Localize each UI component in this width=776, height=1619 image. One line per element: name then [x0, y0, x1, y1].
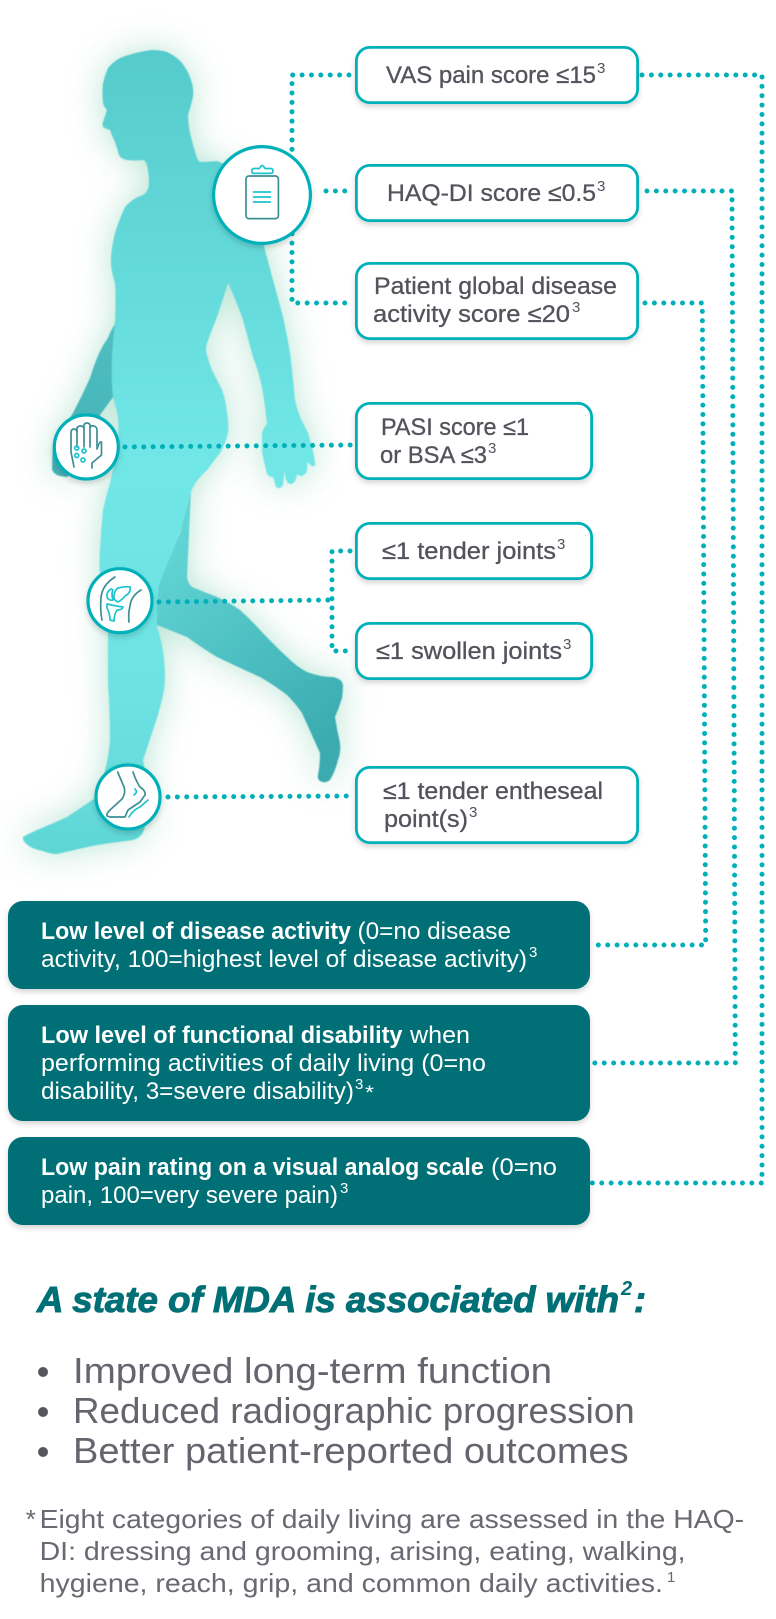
connector: VAS box to pain rating box: [592, 75, 762, 1183]
icon: knee joint: [88, 569, 152, 633]
panel: low pain rating: (0=no: [491, 1154, 557, 1181]
box: tender entheseal points: [356, 767, 638, 843]
box: HAQ-DI score: [356, 165, 638, 221]
panel: low pain rating: 3: [340, 1180, 348, 1197]
panel: low pain rating: [8, 1137, 590, 1225]
box: PASI score or BSA: [356, 403, 592, 479]
bullet list: MDA benefits: Reduced radiographic progression: [73, 1390, 635, 1431]
back arm: [52, 322, 118, 477]
panel: low level of functional disability: disability, 3=severe disability): [41, 1078, 354, 1105]
footnote: hygiene, reach, grip, and common daily activities.: [40, 1568, 663, 1598]
heading: state of MDA: 2: [620, 1278, 632, 1300]
soft glow behind figure: [23, 50, 343, 854]
panel: low level of functional disability: performing activities of daily living (0=no: [41, 1050, 486, 1077]
box: swollen joints: [356, 623, 592, 679]
connector: hand to PASI box: [125, 445, 352, 447]
footnote: Eight categories of daily living are assessed in the HAQ-: [40, 1504, 744, 1534]
box: tender joints: 3: [557, 536, 565, 553]
footnote: [26, 1504, 744, 1598]
box: VAS pain score: [356, 47, 638, 103]
box: VAS pain score: VAS pain score ≤15: [386, 62, 596, 89]
human body figure: [23, 50, 343, 854]
box: patient global disease activity score: Patient global disease: [374, 273, 617, 300]
icon: clipboard: [214, 147, 310, 243]
box: PASI score or BSA: 3: [488, 440, 496, 457]
panel: low level of functional disability: 3: [355, 1076, 363, 1093]
bullet list: MDA benefits: Better patient-reported outcomes: [73, 1430, 629, 1471]
back leg: [150, 490, 343, 782]
icon: hand with skin lesions: [54, 415, 118, 479]
box: HAQ-DI score: 3: [597, 178, 605, 195]
connector: patient global box to disease activity box: [592, 303, 706, 945]
connector: foot to entheseal box: [168, 796, 352, 797]
box: VAS pain score: 3: [597, 60, 605, 77]
connector: HAQ-DI box to functional disability box: [592, 191, 735, 1063]
connector: knee to joint boxes: [159, 551, 350, 651]
box: tender entheseal points: 3: [469, 804, 477, 821]
footnote: 1: [667, 1569, 675, 1586]
heading: state of MDA: :: [634, 1279, 646, 1320]
box: swollen joints: 3: [563, 636, 571, 653]
panel: low level of disease activity: Low level of disease activity: [41, 918, 352, 945]
box: PASI score or BSA: PASI score ≤1: [381, 414, 529, 441]
heading: state of MDA: A state of MDA is associated with: [36, 1279, 619, 1320]
panel: low pain rating: pain, 100=very severe pain): [41, 1182, 338, 1209]
panel: low level of disease activity: activity, 100=highest level of disease activity): [41, 946, 527, 973]
box: tender entheseal points: point(s): [384, 806, 468, 833]
connector: clipboard to top three boxes: [292, 75, 353, 303]
box: HAQ-DI score: HAQ-DI score ≤0.5: [387, 180, 596, 207]
bullet list: MDA benefits: Improved long-term function: [73, 1350, 552, 1391]
footnote: *: [26, 1504, 36, 1534]
box: tender joints: ≤1 tender joints: [382, 538, 556, 565]
footnote: DI: dressing and grooming, arising, eating, walking,: [40, 1536, 686, 1566]
panel: low level of functional disability: Low level of functional disability: [41, 1022, 403, 1049]
panel: low level of disease activity: 3: [529, 944, 537, 961]
panel: low level of functional disability: when: [409, 1022, 470, 1049]
box: tender entheseal points: ≤1 tender entheseal: [383, 778, 603, 805]
front body, head, arm and standing leg: [23, 50, 315, 854]
panel: low level of disease activity: [8, 901, 590, 989]
panel: low pain rating: Low pain rating on a visual analog scale: [41, 1154, 484, 1181]
panel: low level of functional disability: [8, 1005, 590, 1121]
box: patient global disease activity score: activity score ≤20: [373, 301, 570, 328]
box: swollen joints: ≤1 swollen joints: [376, 638, 562, 665]
box: patient global disease activity score: [356, 263, 638, 339]
box: patient global disease activity score: 3: [572, 299, 580, 316]
box: PASI score or BSA: or BSA ≤3: [380, 442, 487, 469]
bullet list: MDA benefits: [38, 1350, 635, 1471]
icon: foot and heel: [96, 765, 160, 829]
panel: low level of functional disability: *: [365, 1083, 375, 1104]
box: tender joints: [356, 523, 592, 579]
panel: low level of disease activity: (0=no disease: [358, 918, 511, 945]
